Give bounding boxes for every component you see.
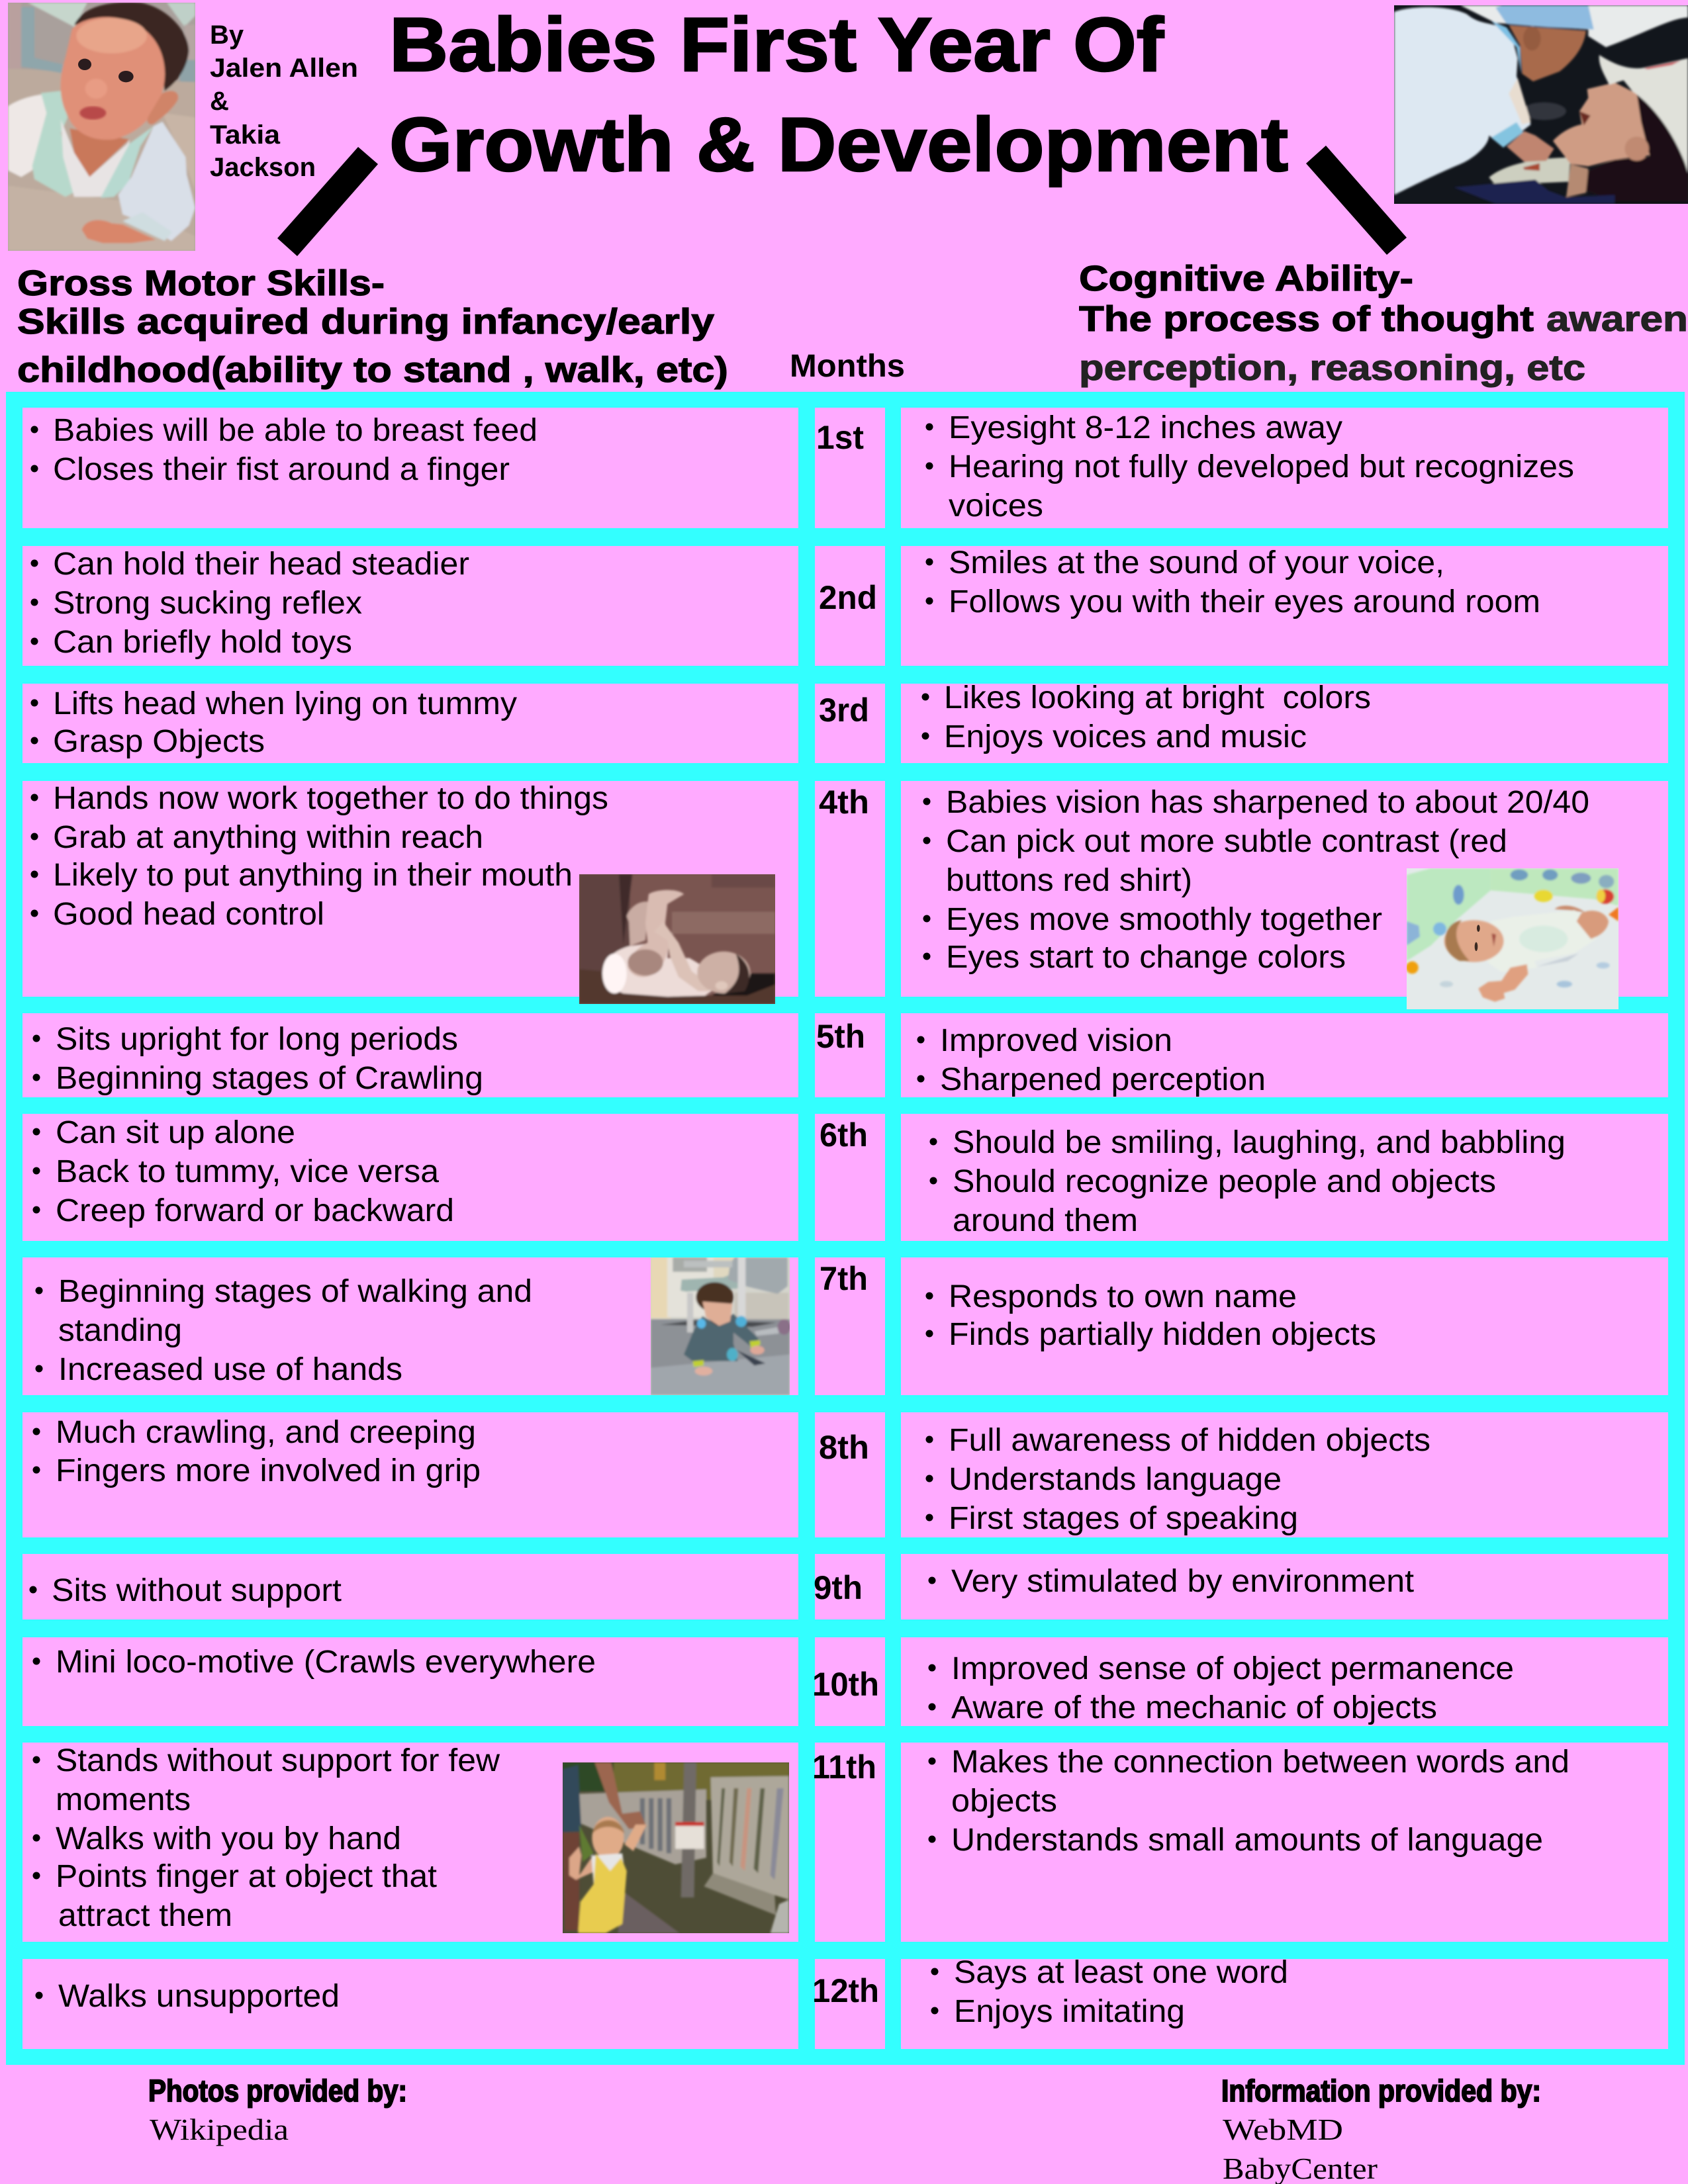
panel: month 11 row: attract them: [58, 1898, 232, 1933]
heading: cognitive ability: The process of thought: [1079, 299, 1534, 339]
panel: month 11 row: Points finger at object that: [56, 1859, 437, 1894]
panel: month 4 row: Hands now work together to do things: [53, 781, 608, 816]
panel: month 2 row: Smiles at the sound of your voice,: [949, 545, 1444, 580]
panel: month 4 row: 4th: [819, 784, 869, 821]
panel: month 2 row: [23, 545, 1668, 666]
panel: month 6 row: 6th: [820, 1116, 868, 1154]
panel: month 3 row: Likes looking at bright colors: [944, 680, 1371, 715]
panel: month 10 row: Mini loco-motive (Crawls everywhere: [56, 1645, 596, 1680]
panel: month 11 row: 11th: [812, 1749, 876, 1786]
panel: month 7 row: 7th: [820, 1260, 868, 1297]
title: Growth & Development: [389, 103, 1288, 187]
panel: month 4 row: [23, 781, 1668, 997]
credit: photos provided by: [148, 2073, 407, 2146]
panel: month 8 row: Much crawling, and creeping: [56, 1415, 476, 1450]
heading: gross motor skills: Skills acquired during infancy/early: [17, 302, 714, 341]
heading: gross motor skills: childhood(ability to stand , walk, etc): [17, 350, 728, 390]
panel: month 6 row: around them: [953, 1203, 1138, 1238]
panel: month 4 row: Can pick out more subtle contrast (red: [946, 824, 1507, 859]
title: [389, 3, 1288, 187]
panel: month 11 row: Stands without support for few: [56, 1743, 500, 1778]
panel: month 6 row: [23, 1114, 1668, 1241]
heading: gross motor skills: [17, 263, 728, 390]
panel: month 5 row: Sits upright for long periods: [56, 1022, 458, 1057]
author credit: Jackson: [210, 153, 316, 182]
credit: photos provided by: Wikipedia: [150, 2113, 289, 2146]
panel: month 10 row: [23, 1637, 1668, 1726]
panel: month 2 row: Can briefly hold toys: [53, 625, 352, 660]
panel: month 1 row: Closes their fist around a finger: [53, 452, 510, 487]
photo: baby walking holding hand by fence: [563, 1762, 789, 1933]
panel: month 10 row: Improved sense of object permanence: [951, 1651, 1514, 1686]
panel: month 9 row: 9th: [814, 1569, 863, 1606]
panel: month 7 row: Increased use of hands: [58, 1352, 402, 1387]
panel: month 11 row: Makes the connection between words and: [951, 1745, 1570, 1780]
credit: information provided by: [1221, 2073, 1541, 2184]
panel: month 11 row: moments: [56, 1782, 191, 1817]
panel: month 2 row: 2nd: [819, 579, 877, 616]
photo: mother lifting laughing baby: [1394, 5, 1688, 204]
panel: month 7 row: [23, 1257, 1668, 1395]
photo: sepia baby holding feet: [579, 874, 775, 1004]
panel: month 9 row: [23, 1554, 1668, 1619]
panel: month 8 row: 8th: [819, 1429, 869, 1466]
panel: month 1 row: [23, 408, 1668, 528]
panel: month 1 row: voices: [949, 488, 1043, 523]
panel: month 5 row: Beginning stages of Crawling: [56, 1061, 483, 1096]
panel: month 9 row: Sits without support: [52, 1573, 342, 1608]
panel: month 1 row: 1st: [816, 419, 864, 456]
panel: month 12 row: Enjoys imitating: [954, 1994, 1185, 2029]
panel: month 4 row: Good head control: [53, 897, 324, 932]
photo: baby crawling on deck: [651, 1257, 790, 1395]
panel: month 12 row: 12th: [812, 1972, 879, 2009]
panel: month 3 row: 3rd: [819, 692, 869, 729]
title: Babies First Year Of: [389, 3, 1164, 87]
panel: month 10 row: 10th: [812, 1666, 879, 1703]
panel: month 10 row: Aware of the mechanic of objects: [951, 1690, 1437, 1725]
panel: month 2 row: Strong sucking reflex: [53, 586, 362, 621]
heading: cognitive ability: [1079, 259, 1688, 388]
panel: month 8 row: [23, 1412, 1668, 1537]
panel: month 1 row: Eyesight 8-12 inches away: [949, 410, 1342, 445]
table frame: [6, 392, 1685, 2065]
panel: month 12 row: Walks unsupported: [58, 1979, 340, 2014]
panel: month 5 row: Sharpened perception: [940, 1062, 1266, 1097]
author credit: By: [210, 21, 244, 50]
panel: month 5 row: 5th: [816, 1018, 865, 1055]
panel: month 7 row: Beginning stages of walking and: [58, 1274, 532, 1309]
panel: month 7 row: Finds partially hidden objects: [949, 1317, 1376, 1352]
heading: gross motor skills: Gross Motor Skills-: [17, 263, 385, 303]
panel: month 3 row: Grasp Objects: [53, 724, 265, 759]
panel: month 4 row: Eyes move smoothly together: [946, 902, 1382, 937]
panel: month 6 row: Should be smiling, laughing, and babbling: [953, 1125, 1566, 1160]
panel: month 8 row: Full awareness of hidden objects: [949, 1423, 1430, 1458]
credit: information provided by: WebMD: [1223, 2113, 1343, 2146]
credit: information provided by: Information provided by:: [1221, 2073, 1541, 2108]
panel: month 8 row: First stages of speaking: [949, 1501, 1298, 1536]
panel: month 3 row: Lifts head when lying on tummy: [53, 686, 517, 721]
panel: month 6 row: Back to tummy, vice versa: [56, 1154, 439, 1189]
panel: month 5 row: [23, 1013, 1668, 1097]
panel: month 8 row: Understands language: [949, 1462, 1282, 1497]
panel: month 11 row: [23, 1743, 1668, 1942]
heading: months: Months: [790, 349, 905, 384]
panel: month 5 row: Improved vision: [940, 1023, 1172, 1058]
panel: month 8 row: Fingers more involved in grip: [56, 1453, 481, 1488]
panel: month 7 row: standing: [58, 1313, 182, 1348]
photo: smiling baby in crib: [1407, 868, 1618, 1009]
panel: month 9 row: Very stimulated by environment: [951, 1564, 1414, 1599]
panel: month 3 row: Enjoys voices and music: [944, 719, 1307, 754]
panel: month 11 row: objects: [951, 1784, 1057, 1819]
heading: cognitive ability: awaren: [1546, 299, 1688, 339]
photo: smiling baby on carpet: [8, 3, 195, 251]
credit: photos provided by: Photos provided by:: [148, 2073, 407, 2108]
panel: month 4 row: buttons red shirt): [946, 863, 1192, 898]
author credit: [210, 21, 358, 182]
author credit: &: [210, 87, 229, 116]
panel: month 6 row: Should recognize people and objects: [953, 1164, 1496, 1199]
panel: month 6 row: Creep forward or backward: [56, 1193, 454, 1228]
heading: cognitive ability: perception, reasoning, etc: [1079, 348, 1585, 388]
panel: month 11 row: Walks with you by hand: [56, 1821, 401, 1856]
panel: month 1 row: Hearing not fully developed but recognizes: [949, 449, 1574, 484]
panel: month 4 row: Likely to put anything in their mouth: [53, 858, 573, 893]
panel: month 2 row: Follows you with their eyes around room: [949, 584, 1540, 619]
author credit: Takia: [210, 120, 281, 150]
panel: month 11 row: Understands small amounts of language: [951, 1823, 1543, 1858]
arrow: left slash to Gross Motor Skills: [277, 147, 378, 256]
heading: cognitive ability: Cognitive Ability-: [1079, 259, 1413, 298]
panel: month 4 row: Grab at anything within reach: [53, 820, 483, 855]
panel: month 6 row: Can sit up alone: [56, 1115, 295, 1150]
panel: month 4 row: Babies vision has sharpened to about 20/40: [946, 785, 1589, 820]
arrow: right slash to Cognitive Ability: [1306, 146, 1407, 255]
panel: month 12 row: Says at least one word: [954, 1955, 1288, 1990]
panel: month 1 row: Babies will be able to breast feed: [53, 413, 538, 448]
panel: month 4 row: Eyes start to change colors: [946, 940, 1346, 975]
panel: month 7 row: Responds to own name: [949, 1279, 1297, 1314]
author credit: Jalen Allen: [210, 54, 358, 83]
panel: month 12 row: [23, 1955, 1668, 2049]
panel: month 2 row: Can hold their head steadier: [53, 547, 469, 582]
panel: month 3 row: [23, 680, 1668, 763]
